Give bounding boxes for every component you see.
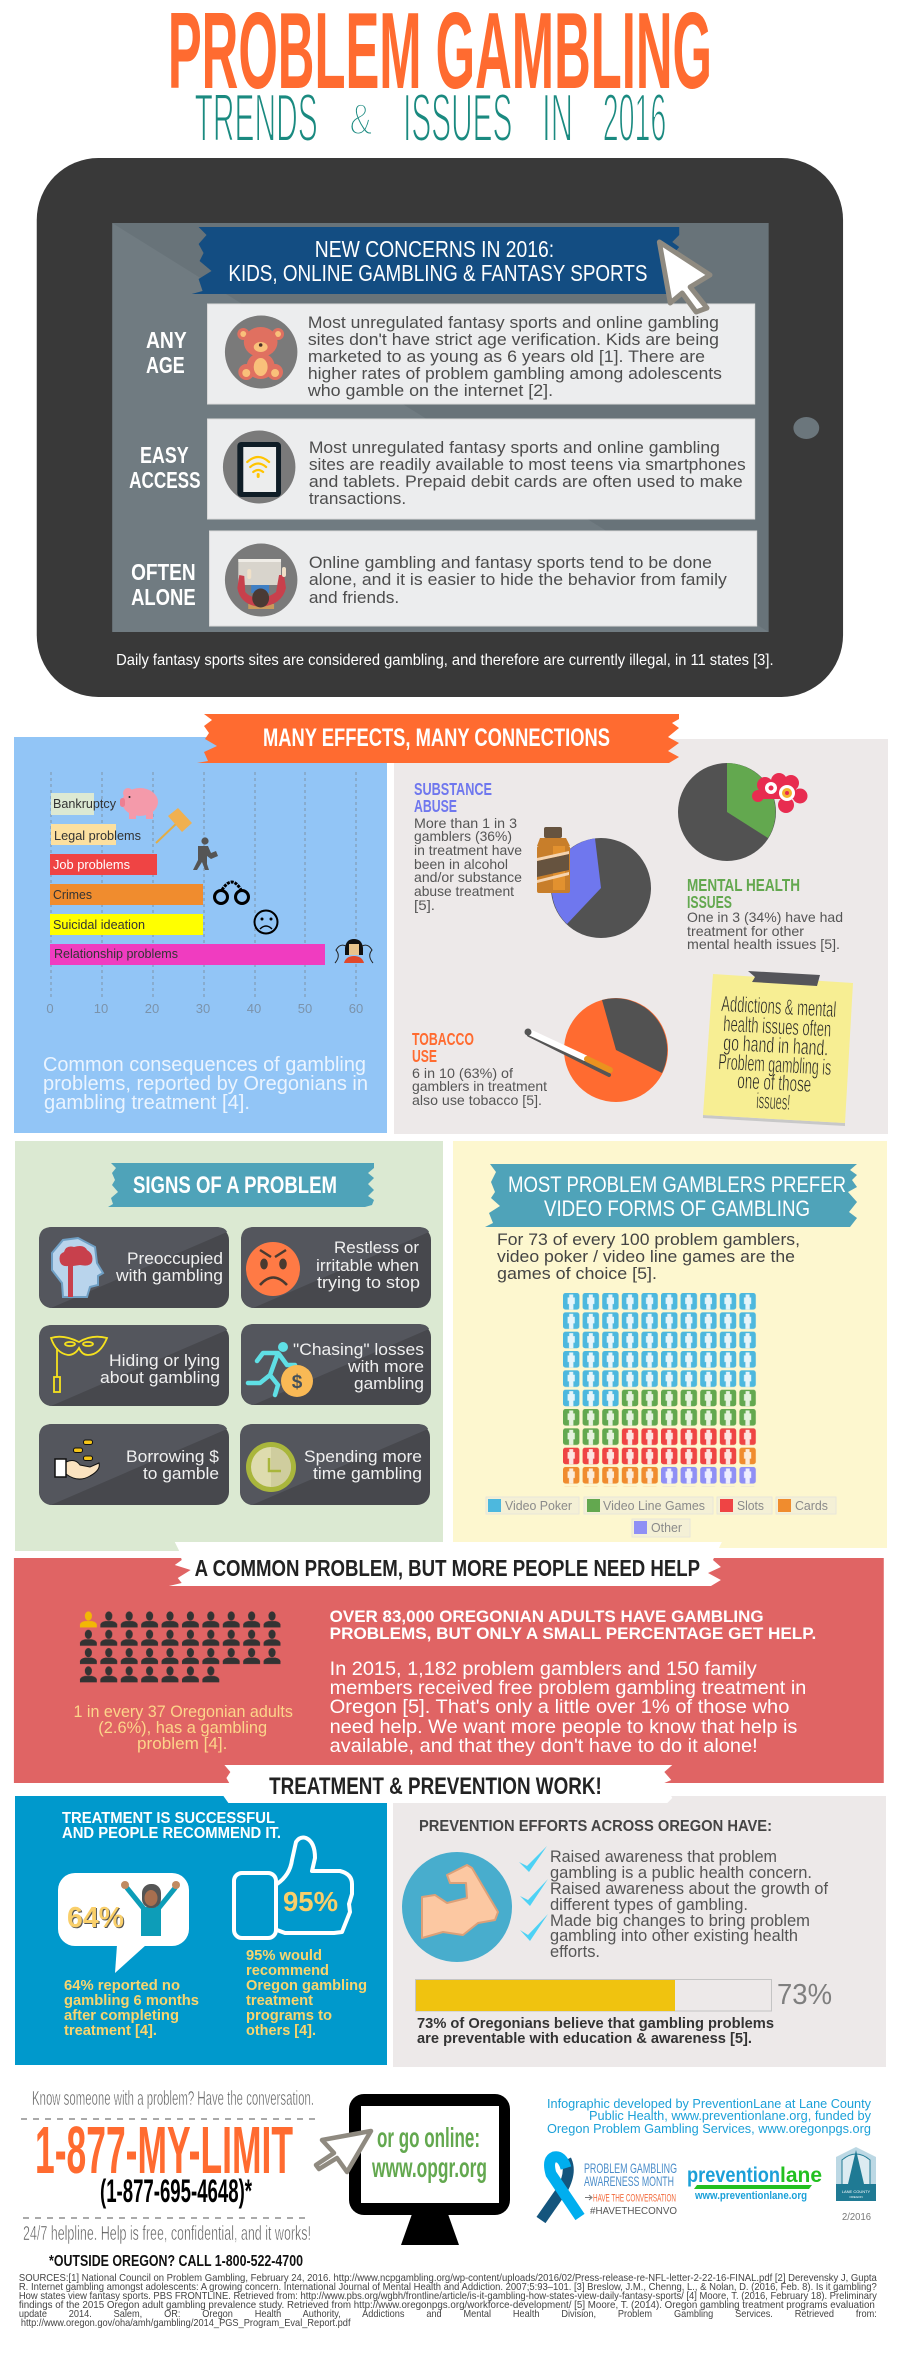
bar chart: Suicidal ideation <box>53 918 145 932</box>
logo: problem gambling awareness month <box>541 2157 677 2220</box>
logo: preventionlane: www.preventionlane.org <box>694 2190 807 2202</box>
bar chart: 20 <box>145 1001 159 1016</box>
heading: treatment successful <box>62 1810 281 1842</box>
bar chart: 0 <box>46 1001 54 1016</box>
legend: Video Line Games <box>603 1498 705 1513</box>
sources: http://www.oregon.gov/oha/amh/gambling/2014_PGS_Program_Eval_Report.pdf <box>21 2318 351 2329</box>
sign: hiding: about gambling <box>100 1368 220 1387</box>
sign: hiding: Hiding or lying <box>109 1351 220 1370</box>
caption: 1 in 37: (2.6%), has a gambling <box>98 1718 267 1737</box>
heading: 83,000 adults <box>330 1607 816 1643</box>
text: any age: marketed to as young as 6 years old [1]. There are <box>308 347 705 366</box>
text: easy access: Most unregulated fantasy sports and online gambling <box>309 438 720 457</box>
subtitle: TRENDS <box>195 81 318 156</box>
caption: 73% <box>417 2015 774 2047</box>
text: prevention list: gambling is a public health concern. <box>550 1864 812 1882</box>
icon: clock <box>246 1442 296 1492</box>
text: often alone <box>309 553 727 607</box>
panel: treatment works <box>15 1796 387 2065</box>
logo: lane county <box>836 2147 876 2201</box>
icon: monitor with website: or go online: <box>377 2122 480 2153</box>
icon: brain in head <box>52 1238 103 1297</box>
text: help body: members received free problem gambling treatment in <box>330 1678 806 1699</box>
icon: runner with coin: $ <box>292 1372 303 1393</box>
bar chart: Bankruptcy <box>53 797 117 811</box>
caption: 1 in 37: problem [4]. <box>137 1734 227 1753</box>
text: video intro: video poker / video line games are the <box>497 1248 795 1266</box>
side labels: EASY <box>140 442 189 468</box>
icon: handcuffs <box>214 882 248 904</box>
legend: Other <box>651 1520 683 1535</box>
sign: borrowing <box>39 1424 229 1505</box>
icon: person alone at laptop <box>225 544 297 616</box>
caption: 1 in 37 <box>73 1702 293 1753</box>
logo: lane county: LANE COUNTY <box>842 2189 871 2194</box>
caption: 95%: others [4]. <box>246 2022 316 2039</box>
text: tobacco: TOBACCO <box>412 1029 474 1049</box>
text: mental health <box>687 875 843 952</box>
card: often alone <box>210 531 757 626</box>
text: any age: who gamble on the internet [2]. <box>307 381 553 400</box>
icon: cheering person <box>121 1881 180 1936</box>
text: substance abuse: SUBSTANCE <box>414 779 492 799</box>
caption: 95%: recommend <box>246 1962 329 1979</box>
bar chart: Crimes <box>53 888 92 902</box>
speech bubble: 64%: 64% <box>67 1902 124 1934</box>
text: video intro: For 73 of every 100 problem gamblers, <box>497 1231 800 1249</box>
bar chart: 50 <box>298 1001 312 1016</box>
banner: new concerns <box>192 227 679 294</box>
logo: preventionlane <box>687 2164 822 2202</box>
bar chart: 10 <box>94 1001 108 1016</box>
icon: flexed arm <box>402 1852 512 1962</box>
text: substance abuse: gamblers (36%) <box>414 828 512 844</box>
text: mental health: One in 3 (34%) have had <box>687 909 843 925</box>
caption: chart: problems, reported by Oregonians in <box>43 1073 368 1095</box>
icon: gavel <box>156 808 192 843</box>
icon: sad face <box>254 910 278 934</box>
text: tobacco: also use tobacco [5]. <box>412 1092 542 1108</box>
logo: problem gambling awareness month: PROBLEM GAMBLING <box>584 2160 677 2176</box>
text: mental health: MENTAL HEALTH <box>687 875 800 895</box>
text: any age: Most unregulated fantasy sports and online gambling <box>308 313 719 332</box>
panel: need help <box>14 1558 884 1783</box>
icon: hand with coins <box>55 1440 99 1479</box>
banner: signs: SIGNS OF A PROBLEM <box>133 1172 337 1199</box>
text: tobacco: 6 in 10 (63%) of <box>412 1065 513 1081</box>
banner: treatment and prevention: TREATMENT & PREVENTION WORK! <box>269 1773 602 1800</box>
bar chart: 30 <box>196 1001 210 1016</box>
banner: common problem: A COMMON PROBLEM, BUT MORE PEOPLE NEED HELP <box>195 1555 700 1581</box>
sign: preoccupied <box>39 1227 229 1308</box>
sticky note: issues! <box>756 1088 791 1115</box>
caption: chart: gambling treatment [4]. <box>44 1092 250 1114</box>
progress bar: 73%: 73% <box>777 1979 832 2011</box>
speech bubble: 64%: 64% <box>68 1903 125 1935</box>
text: substance abuse <box>414 779 522 913</box>
card: any age <box>208 304 755 404</box>
sign: chasing: "Chasing" losses <box>293 1340 424 1359</box>
icon: tablet with wifi <box>223 430 295 504</box>
pictogram chart: 100 gamblers <box>563 1293 759 1486</box>
text: substance abuse: [5]. <box>414 897 435 913</box>
sign: restless: Restless or <box>334 1238 419 1257</box>
icon: mask <box>51 1337 107 1392</box>
side labels <box>129 327 201 610</box>
caption: 95%: 95% would <box>246 1947 322 1964</box>
subtitle: ISSUES <box>403 81 512 156</box>
text: tobacco: gamblers in treatment <box>412 1078 547 1094</box>
text: often alone: Online gambling and fantasy sports tend to be done <box>309 553 712 572</box>
progress bar: 73% <box>416 1979 832 2011</box>
sign: spending time <box>240 1424 430 1505</box>
icon: teddy bear <box>225 316 297 388</box>
icon: checkmarks <box>519 1846 548 1941</box>
icon: flower with gears <box>752 773 808 813</box>
text: prevention list: different types of gambling. <box>550 1896 748 1914</box>
card: easy access <box>208 419 755 519</box>
text: substance abuse: abuse treatment <box>414 883 514 899</box>
text: mental health: mental health issues [5]. <box>687 936 840 952</box>
banner: video forms: VIDEO FORMS OF GAMBLING <box>544 1196 810 1221</box>
sources <box>19 2273 877 2329</box>
bar chart: 60 <box>349 1001 363 1016</box>
sign: spending time: Spending more <box>304 1447 422 1466</box>
subtitle: IN <box>542 81 573 156</box>
caption: 64%: treatment [4]. <box>64 2022 157 2039</box>
banner: treatment and prevention <box>223 1765 672 1803</box>
pictogram: 1 in 37 <box>79 1611 284 1684</box>
logo: preventionlane: lane <box>780 2164 822 2187</box>
legend: Cards <box>795 1498 828 1513</box>
icon: businessman <box>193 837 218 870</box>
text: substance abuse: ABUSE <box>414 796 457 816</box>
side labels: ANY <box>146 327 187 353</box>
caption: 95%: treatment <box>246 1992 313 2009</box>
tablet home button <box>793 417 819 439</box>
side labels: OFTEN <box>131 559 196 585</box>
phone digits: (1-877-695-4648)* <box>100 2173 252 2209</box>
legend: Video Poker <box>505 1498 573 1513</box>
text: often alone: alone, and it is easier to hide the behavior from family <box>309 570 727 589</box>
text: prevention list: efforts. <box>550 1943 600 1961</box>
sources: SOURCES:[1] National Council on Problem Gambling, February 24, 2016. http://www.ncpgambling.org/wp-content/uploads/2016/02/Press-release-re-NFL-letter-2-22-16-FINAL.pdf [2] Derevensky J, Gupta <box>19 2273 877 2284</box>
text: outside oregon: *OUTSIDE OREGON? CALL 1-800-522-4700 <box>49 2253 303 2270</box>
heading: treatment successful: AND PEOPLE RECOMMEND IT. <box>62 1825 281 1842</box>
caption: chart: Common consequences of gambling <box>43 1054 366 1076</box>
text: easy access: transactions. <box>309 489 406 508</box>
icon: runner with coin <box>248 1342 313 1397</box>
bar chart: Job problems <box>53 858 130 872</box>
icon: angry face <box>246 1242 300 1296</box>
legend: Slots <box>737 1498 764 1513</box>
text: video intro <box>497 1231 800 1283</box>
text: help body: In 2015, 1,182 problem gamblers and 150 family <box>330 1659 757 1680</box>
caption: 73%: 73% of Oregonians believe that gambling problems <box>417 2015 774 2032</box>
text: help body: available, and that they don't have to do it alone! <box>330 1736 758 1757</box>
tablet screen <box>112 223 769 632</box>
panel: connections <box>394 739 888 1134</box>
text: easy access <box>309 438 746 508</box>
text: help body <box>330 1659 806 1757</box>
text: tobacco <box>412 1029 547 1108</box>
text: prevention list: Made big changes to bring problem <box>550 1912 810 1930</box>
sign: chasing: with more <box>347 1357 424 1376</box>
text: help body: Oregon [5]. That's only a little over 1% of those who <box>330 1697 789 1718</box>
text: helpline info: 24/7 helpline. Help is free, confidential, and it works! <box>23 2223 311 2245</box>
credits text: Infographic developed by PreventionLane at Lane County <box>547 2096 871 2111</box>
sign: spending time: time gambling <box>313 1464 422 1483</box>
phone number: 1-877-MY-LIMIT <box>35 2113 293 2188</box>
speech bubble: 64% <box>58 1873 189 1973</box>
logo: preventionlane: prevention <box>687 2164 780 2187</box>
panel: tablet new concerns <box>37 158 843 697</box>
text: prevention list: gambling into other existing health <box>550 1927 798 1945</box>
text: help body: need help. We want more people to know that help is <box>330 1717 797 1738</box>
sign: hiding <box>39 1325 229 1406</box>
text: mental health: ISSUES <box>687 892 732 912</box>
text: prevention list <box>550 1848 828 1961</box>
credits text: Public Health, www.preventionlane.org, funded by <box>589 2108 871 2123</box>
text: mental health: treatment for other <box>687 923 804 939</box>
sign: preoccupied: with gambling <box>115 1266 223 1285</box>
icon: monitor with website <box>316 2094 510 2245</box>
pie chart: tobacco <box>564 998 668 1102</box>
icon: cursor <box>316 2131 371 2172</box>
text: 2016 <box>603 81 666 156</box>
credits text: Oregon Problem Gambling Services, www.oregonpgs.org <box>547 2121 871 2136</box>
banner: new concerns: NEW CONCERNS IN 2016: <box>315 236 554 262</box>
text: easy access: and tablets. Prepaid debit cards are often used to make <box>309 472 743 491</box>
text: often alone: and friends. <box>309 588 399 607</box>
sticky note <box>703 971 853 1126</box>
text: any age: sites don't have strict age verification. Kids are being <box>308 330 719 349</box>
logo: lane county: OREGON <box>849 2195 863 2199</box>
bar chart: 40 <box>247 1001 261 1016</box>
icon: cigarette <box>524 1028 610 1075</box>
caption: 73%: are preventable with education & awareness [5]. <box>417 2030 752 2047</box>
sign: restless <box>241 1227 431 1308</box>
sign: chasing <box>241 1324 431 1405</box>
text: substance abuse: been in alcohol <box>414 856 508 872</box>
sticky note: go hand in hand. <box>723 1030 829 1060</box>
caption: 64%: 64% reported no <box>64 1977 180 1994</box>
pie chart: mental health <box>678 763 776 861</box>
icon: distressed woman <box>335 939 373 963</box>
caption: 64%: gambling 6 months <box>64 1992 199 2009</box>
icon: piggy bank <box>120 788 158 819</box>
banner: video forms: MOST PROBLEM GAMBLERS PREFER <box>508 1172 846 1197</box>
sign: restless: trying to stop <box>317 1273 420 1292</box>
banner: many effects <box>197 714 679 763</box>
text: have the conversation: Know someone with a problem? Have the conversation. <box>32 2088 314 2110</box>
sign: borrowing: to gamble <box>143 1464 219 1483</box>
banner: many effects: MANY EFFECTS, MANY CONNECTIONS <box>263 724 610 752</box>
credits text <box>547 2096 871 2136</box>
bar chart: Legal problems <box>54 829 141 843</box>
sources: How states view fantasy sports. PBS FRONTLINE. Retrieved from: http://www.pbs.org/wgbh/frontline/article/is-it-gambling-how-states-view-daily-fantasy-sports/ [4] Moore, T. (2016, February 18). Preliminary <box>19 2291 877 2302</box>
text: substance abuse: More than 1 in 3 <box>414 815 517 831</box>
heading: prevention efforts: PREVENTION EFFORTS ACROSS OREGON HAVE: <box>419 1818 772 1835</box>
caption: 1 in 37: 1 in every 37 Oregonian adults <box>73 1702 293 1721</box>
icon: cursor arrow <box>659 242 710 312</box>
sign: preoccupied: Preoccupied <box>127 1249 223 1268</box>
heading: 83,000 adults: PROBLEMS, BUT ONLY A SMALL PERCENTAGE GET HELP. <box>330 1624 816 1643</box>
side labels: AGE <box>146 352 185 378</box>
pie chart: substance abuse <box>551 838 651 938</box>
banner: video forms <box>485 1164 857 1227</box>
icon: thumbs up 95% <box>234 1838 352 1938</box>
bar chart: Relationship problems <box>54 947 178 961</box>
text: prevention list: Raised awareness that problem <box>550 1848 777 1866</box>
text: tobacco: USE <box>412 1046 437 1066</box>
sticky note: one of those <box>737 1068 812 1097</box>
logo: problem gambling awareness month: #HAVETHECONVO <box>590 2206 677 2217</box>
panel: prevention <box>393 1796 886 2067</box>
banner: signs <box>108 1163 374 1207</box>
heading: 83,000 adults: OVER 83,000 OREGONIAN ADULTS HAVE GAMBLING <box>330 1607 764 1626</box>
sources: R. Internet gambling amongst adolescents: A growing concern. International Journal of Mental Health and Addiction. 2007;5:93–101. [3] Breslow, J.M., Chenng, L., & Nolan, D. (2016, Feb. 8). Is it gambling? <box>19 2282 877 2293</box>
text: prevention list: Raised awareness about the growth of <box>550 1880 828 1898</box>
heading: treatment successful: TREATMENT IS SUCCESSFUL <box>62 1810 275 1827</box>
sign: borrowing: Borrowing $ <box>126 1447 220 1466</box>
icon: thumbs up 95%: 95% <box>283 1886 338 1917</box>
banner: new concerns: KIDS, ONLINE GAMBLING & FANTASY SPORTS <box>228 260 647 286</box>
icon: bottle <box>537 827 570 893</box>
caption: chart <box>43 1054 368 1114</box>
bar chart <box>46 772 363 1016</box>
text: substance abuse: and/or substance <box>414 869 522 885</box>
caption: 64%: after completing <box>64 2007 179 2024</box>
side labels: ACCESS <box>129 467 201 493</box>
sign: restless: irritable when <box>316 1256 419 1275</box>
side labels: ALONE <box>131 584 196 610</box>
sources: findings of the 2015 Oregon adult gambling prevalence study. Retrieved from http://www.oregonpgs.org/workforce-development/ [5] Moore, T. (2014). Oregon gambling treatment programs evaluation <box>19 2300 875 2311</box>
text: any age <box>307 313 722 400</box>
caption: 64% <box>64 1977 199 2039</box>
subtitle <box>195 81 666 156</box>
panel: consequences chart <box>14 737 387 1133</box>
legend <box>486 1497 836 1537</box>
text: video intro: games of choice [5]. <box>497 1265 657 1283</box>
panel: signs of a problem <box>15 1141 443 1551</box>
text: any age: higher rates of problem gambling among adolescents <box>308 364 722 383</box>
logo: problem gambling awareness month: HAVE THE CONVERSATION <box>593 2192 676 2204</box>
sign: chasing: gambling <box>354 1374 424 1393</box>
helpline block <box>21 2088 316 2270</box>
banner: common problem <box>169 1542 722 1586</box>
note: illegal in 11 states: Daily fantasy sports sites are considered gambling, and therefore are currently illegal, in 11 states [3]. <box>116 652 774 669</box>
panel: video gambling <box>453 1141 887 1548</box>
date: 2/2016 <box>842 2212 871 2223</box>
text: easy access: sites are readily available to most teens via smartphones <box>309 455 746 474</box>
caption: 95%: programs to <box>246 2007 332 2024</box>
text: substance abuse: in treatment have <box>414 842 522 858</box>
caption: 95% <box>246 1947 367 2039</box>
caption: 95%: Oregon gambling <box>246 1977 367 1994</box>
subtitle: & <box>350 95 372 144</box>
logo: problem gambling awareness month: AWARENESS MONTH <box>584 2173 674 2189</box>
icon: monitor with website: www.opgr.org <box>371 2152 487 2183</box>
